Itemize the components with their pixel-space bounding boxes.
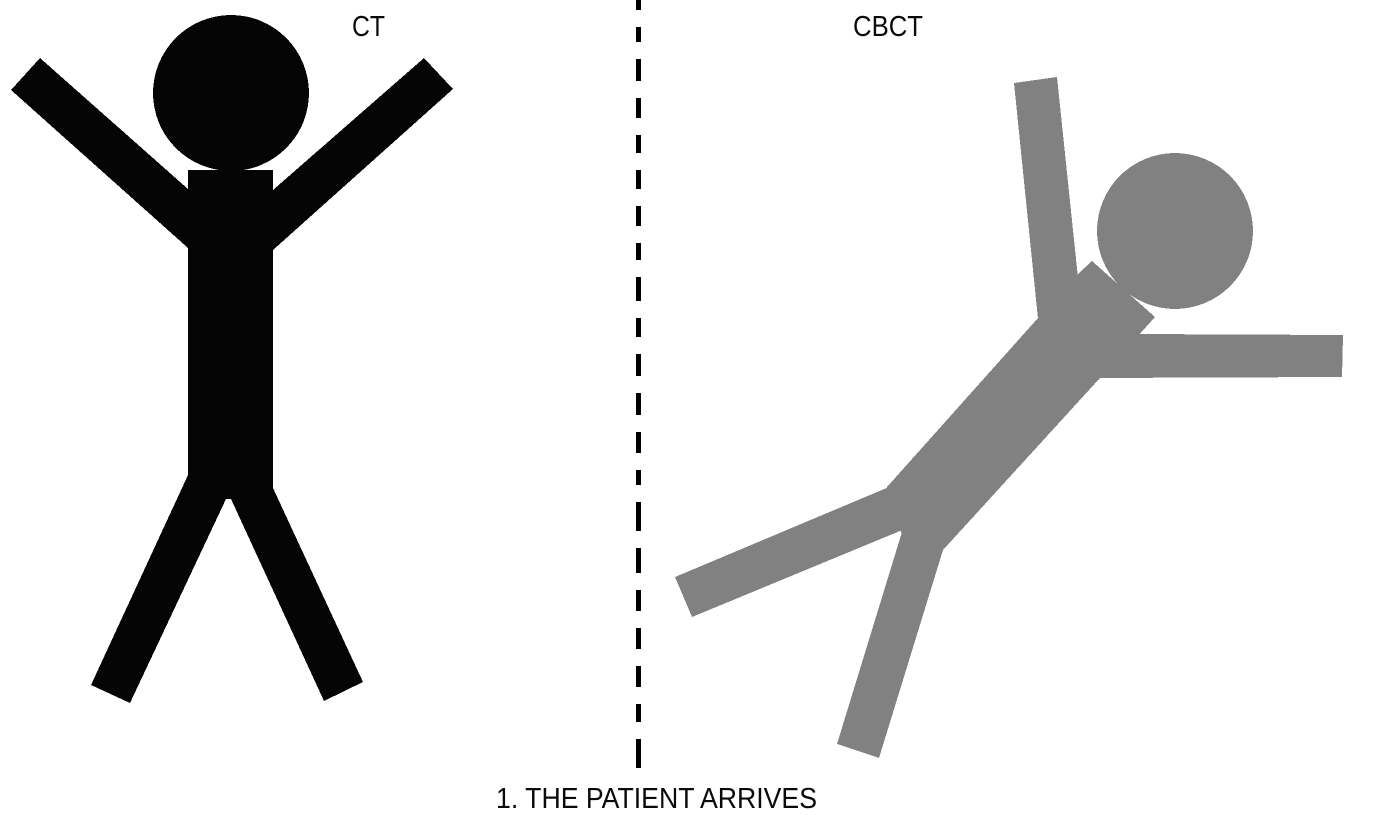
- CBCT figure right leg: [837, 532, 943, 758]
- CBCT figure raised arm: [1014, 77, 1078, 319]
- figure: CBCT patient tilted in grey: [675, 77, 1343, 758]
- heading: CT: CT: [352, 11, 385, 43]
- CT figure right leg: [228, 480, 363, 701]
- CT figure left leg: [91, 475, 228, 703]
- CT figure torso: [188, 170, 273, 499]
- heading: CBCT: CBCT: [853, 11, 923, 43]
- CBCT figure torso: [887, 261, 1155, 550]
- CBCT figure left leg: [675, 487, 905, 617]
- CT figure right arm: [273, 58, 453, 250]
- CT figure head: [153, 15, 309, 171]
- CBCT figure head: [1097, 153, 1253, 309]
- CT figure left arm: [11, 58, 188, 248]
- caption: 1. THE PATIENT ARRIVES: 1. THE PATIENT ARRIVES: [496, 783, 817, 815]
- figure: CT patient standing upright in black: [11, 15, 453, 703]
- dashed vertical divider: [636, 0, 641, 768]
- CBCT figure outstretched arm: [1090, 334, 1343, 378]
